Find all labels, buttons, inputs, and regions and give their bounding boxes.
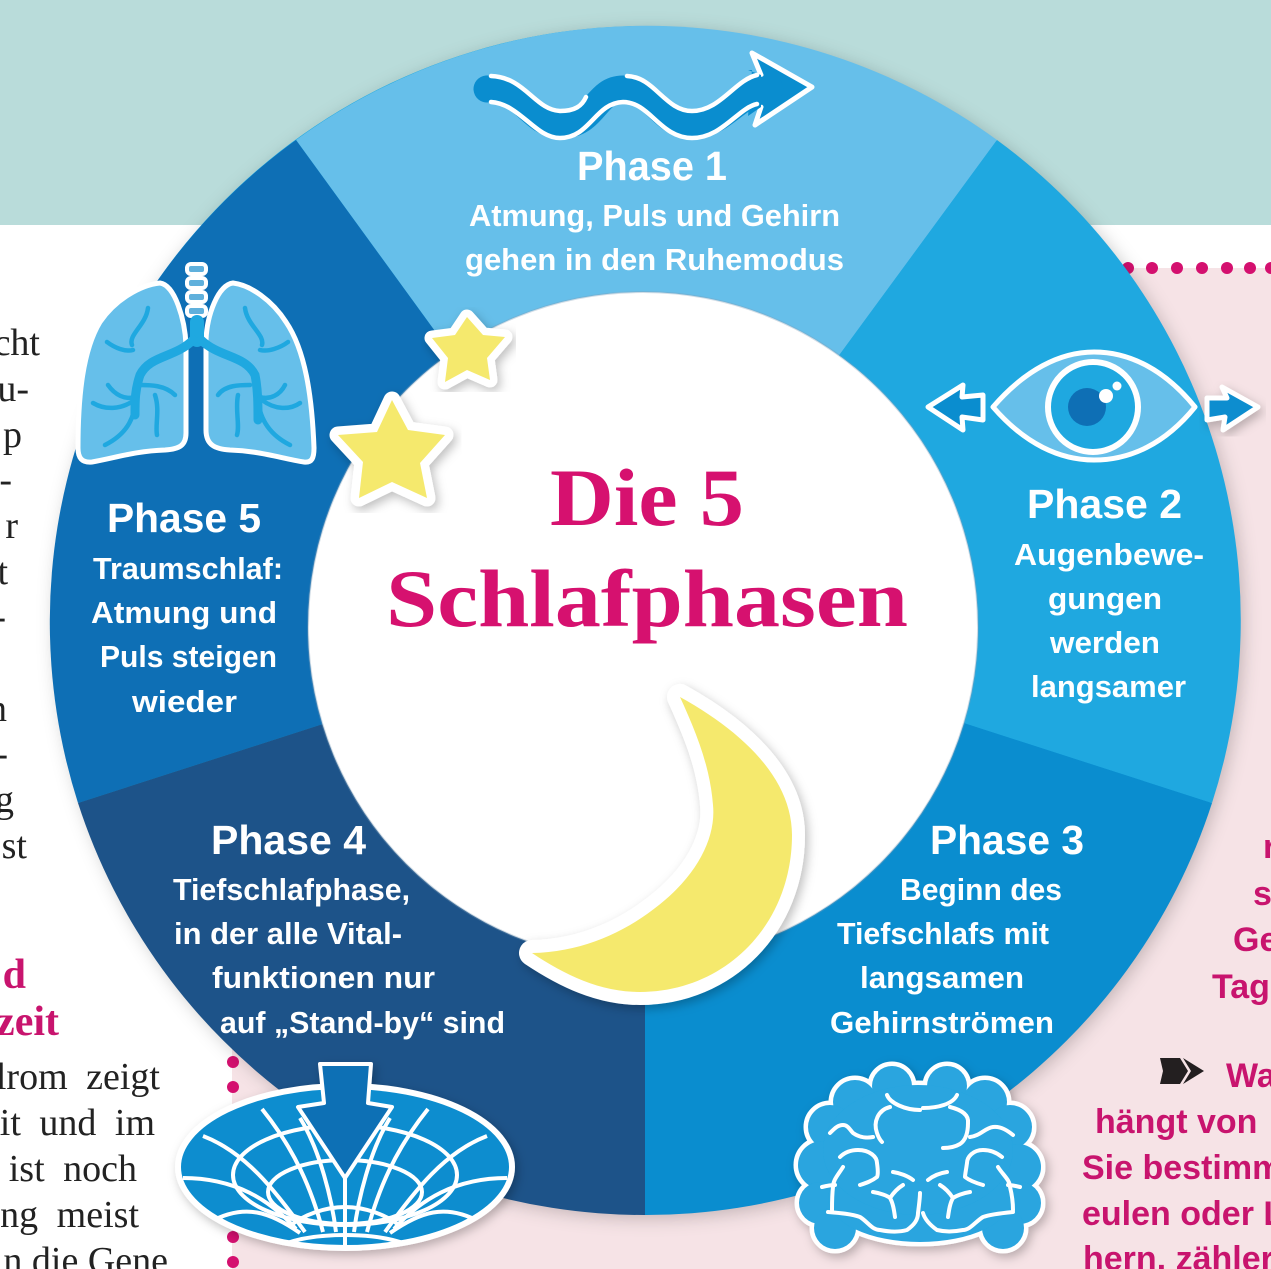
text block: phase 2 description (1014, 537, 1204, 704)
icon: black double arrow (1160, 1058, 1204, 1084)
heading: left column subheading: d (3, 952, 26, 998)
text block: phase 4 description: Tiefschlafphase, (173, 872, 410, 907)
title: Die 5 (550, 452, 744, 543)
text block: phase 2 description: gungen (1048, 581, 1162, 616)
text block: pink box text (1082, 828, 1271, 1269)
text block: phase 4 description: funktionen nur (212, 960, 435, 995)
text block: phase 1 description: gehen in den Ruhemodus (465, 242, 844, 277)
heading: left column subheading (0, 952, 59, 1045)
heading: phase 2: Phase 2 (1027, 481, 1182, 527)
icon: large star (338, 400, 445, 498)
text block: phase 3 description: Tiefschlafs mit (837, 916, 1049, 951)
background: teal header band (0, 0, 1271, 225)
panel: phase 2 (645, 140, 1241, 803)
panel: phase 5 (50, 140, 645, 803)
text block: left column lower text: lrom zeigt (0, 1056, 160, 1098)
text block: phase 4 description (173, 872, 505, 1040)
text block: phase 1 description (465, 198, 844, 277)
title: Schlafphasen (386, 553, 908, 644)
panel: phase 1 (296, 26, 997, 620)
text block: phase 4 description: in der alle Vital- (174, 916, 402, 951)
text block: phase 5 description: Atmung und (91, 595, 277, 630)
text block: phase 5 description (91, 551, 283, 719)
text block: phase 1 description: Atmung, Puls und Gehirn (469, 198, 840, 233)
text block: phase 3 description: Gehirnströmen (830, 1005, 1054, 1040)
text block: phase 2 description: werden (1049, 625, 1160, 660)
icon: funnel with arrow (178, 1064, 512, 1252)
text block: phase 5 description: wieder (131, 684, 237, 719)
heading: phase 1: Phase 1 (577, 143, 727, 189)
text block: phase 3 description (830, 872, 1062, 1040)
icon: crescent moon (532, 697, 792, 992)
panel: pink info box (227, 262, 1271, 1269)
text block: phase 2 description: langsamer (1031, 669, 1186, 704)
text block: left column body text: p (3, 414, 22, 456)
icon: lungs (78, 264, 314, 462)
text block: phase 4 description: auf „Stand-by“ sind (220, 1005, 505, 1040)
text block: phase 2 description: Augenbewe- (1014, 537, 1204, 572)
icon: wave arrow (487, 53, 812, 138)
text block: left column lower text: ist noch (9, 1148, 137, 1190)
text block: phase 5 description: Puls steigen (100, 639, 277, 674)
text block: left column body text (0, 322, 40, 867)
text block: left column lower text: it und im (0, 1102, 155, 1144)
heading: phase 5: Phase 5 (107, 495, 261, 541)
text block: pink box text: hängt von (1095, 1103, 1257, 1141)
text block: phase 5 description: Traumschlaf: (93, 551, 283, 586)
text block: phase 3 description: langsamen (860, 960, 1024, 995)
text block: left column body text: r (5, 505, 18, 547)
panel: phase 3 (645, 620, 1212, 1215)
title (386, 452, 908, 644)
text block: phase 3 description: Beginn des (900, 872, 1062, 907)
text block: left column lower text (0, 1056, 168, 1269)
icon: eye with arrows (928, 352, 1258, 460)
icon: brain (798, 1066, 1041, 1249)
panel: phase 4 (78, 620, 645, 1215)
heading: phase 4: Phase 4 (211, 817, 366, 863)
text block: left column body text: st (2, 825, 27, 867)
text block: left column lower text: ng meist (0, 1194, 139, 1236)
icon: small star (432, 317, 505, 382)
heading: phase 3: Phase 3 (930, 817, 1084, 863)
center circle (308, 292, 978, 962)
